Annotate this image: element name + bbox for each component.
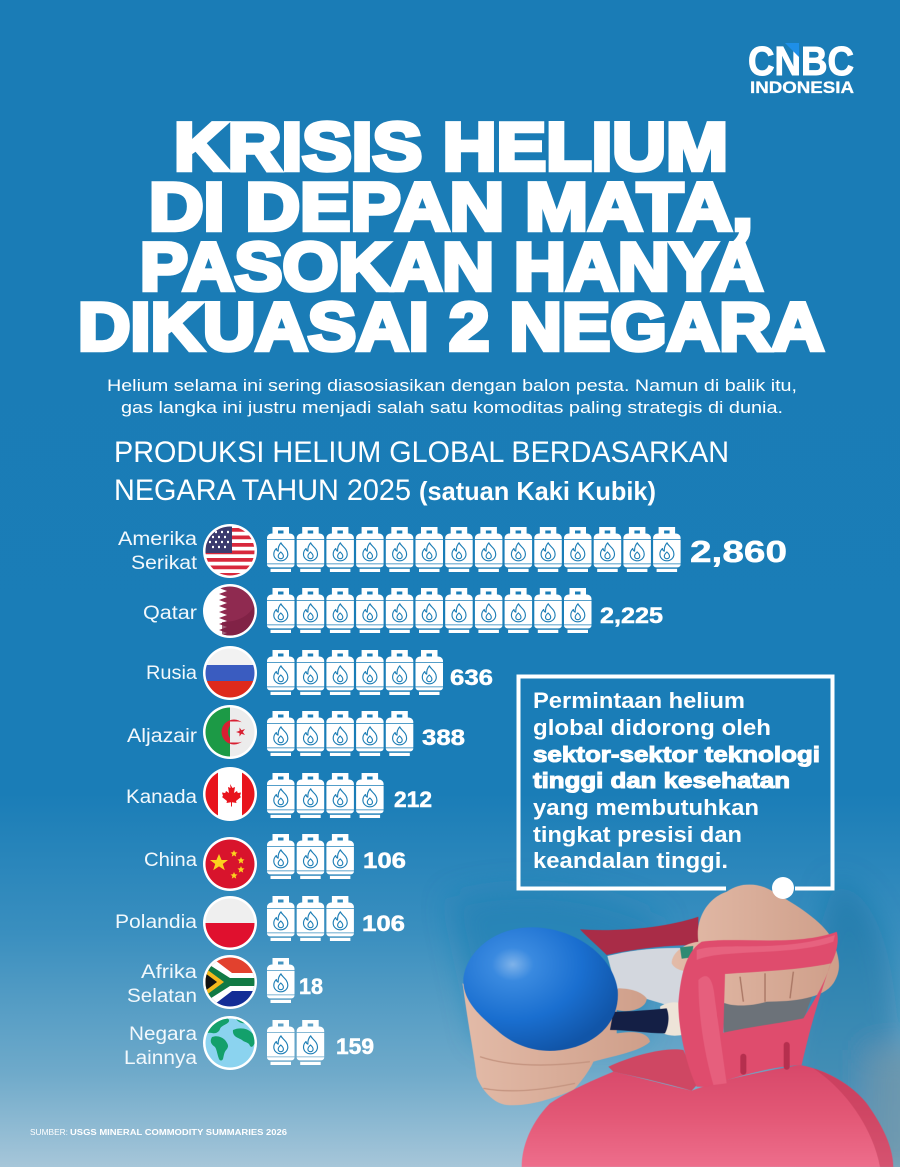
source: USGS MINERAL COMMODITY SUMMARIES 2026 — [70, 1128, 288, 1137]
row: Qatar: 2,225 — [600, 603, 663, 628]
row: Afrika Selatan — [127, 955, 323, 1009]
row: Afrika Selatan: Afrika — [141, 962, 197, 983]
row: Kanada: 212 — [394, 787, 432, 812]
logo: CNBC Indonesia: CNBC — [748, 38, 854, 84]
row: Polandia — [115, 896, 405, 950]
callout: sektor-sektor teknologi — [533, 742, 820, 767]
callout: Permintaan helium — [533, 688, 745, 713]
callout: global didorong oleh — [533, 715, 771, 740]
row: Aljazair — [127, 705, 465, 759]
tank top plate — [608, 1049, 698, 1091]
title: DIKUASAI 2 NEGARA — [78, 290, 824, 365]
row: Aljazair: 388 — [422, 725, 465, 750]
title: DI DEPAN MATA, — [149, 170, 753, 245]
row: Negara Lainnya: Negara — [129, 1024, 197, 1045]
row: Kanada: Kanada — [126, 787, 197, 808]
row: Amerika Serikat: Serikat — [131, 553, 198, 574]
title: PASOKAN HANYA — [140, 230, 763, 305]
row: Negara Lainnya: Lainnya — [124, 1048, 197, 1069]
lower hand — [463, 983, 650, 1105]
callout: yang membutuhkan — [533, 795, 759, 820]
photo: hand, balloon and pink helium tank — [463, 884, 893, 1167]
callout: tinggi dan kesehatan — [533, 768, 790, 793]
row: Kanada — [126, 767, 432, 821]
intro text — [107, 376, 797, 417]
chart heading: (satuan Kaki Kubik) — [419, 476, 656, 506]
tank body — [522, 1065, 893, 1167]
title — [78, 110, 824, 365]
source: SUMBER: — [30, 1128, 68, 1137]
row: Amerika Serikat — [118, 524, 787, 578]
row: Qatar: Qatar — [143, 603, 198, 624]
upper hand — [672, 884, 839, 1005]
row: China: China — [144, 850, 197, 871]
row: Polandia: Polandia — [115, 912, 197, 933]
callout: tingkat presisi dan — [533, 822, 742, 847]
row: Polandia: 106 — [362, 911, 405, 936]
row: Rusia — [146, 646, 493, 700]
balloon — [463, 927, 618, 1051]
chart heading — [114, 436, 729, 507]
intro text: gas langka ini justru menjadi salah satu komoditas paling strategis di dunia. — [121, 398, 783, 417]
row: Qatar — [143, 584, 663, 638]
row: Rusia: 636 — [450, 665, 493, 690]
row: Aljazair: Aljazair — [127, 726, 198, 747]
nozzle — [660, 1002, 682, 1036]
row: China: 106 — [363, 848, 406, 873]
row: Negara Lainnya — [124, 1016, 374, 1070]
callout: keandalan tinggi. — [533, 848, 728, 873]
intro text: Helium selama ini sering diasosiasikan dengan balon pesta. Namun di balik itu, — [107, 376, 797, 395]
row: Negara Lainnya: 159 — [336, 1034, 374, 1059]
photo: blurred sweater background — [450, 880, 900, 1167]
row: China — [144, 834, 406, 891]
row: Amerika Serikat: 2,860 — [690, 534, 787, 569]
row: Afrika Selatan: 18 — [299, 974, 323, 999]
logo: CNBC Indonesia: INDONESIA — [750, 78, 854, 97]
row: Afrika Selatan: Selatan — [127, 986, 197, 1007]
row: Rusia: Rusia — [146, 663, 197, 684]
title: KRISIS HELIUM — [174, 110, 728, 185]
chart heading: NEGARA TAHUN 2025 — [114, 474, 411, 507]
tank handle — [678, 932, 838, 1087]
grey shirt panel — [607, 948, 683, 1010]
chart heading: PRODUKSI HELIUM GLOBAL BERDASARKAN — [114, 436, 729, 469]
row: Amerika Serikat: Amerika — [118, 529, 197, 550]
callout — [518, 676, 832, 899]
back strap of tank handle — [580, 917, 698, 955]
